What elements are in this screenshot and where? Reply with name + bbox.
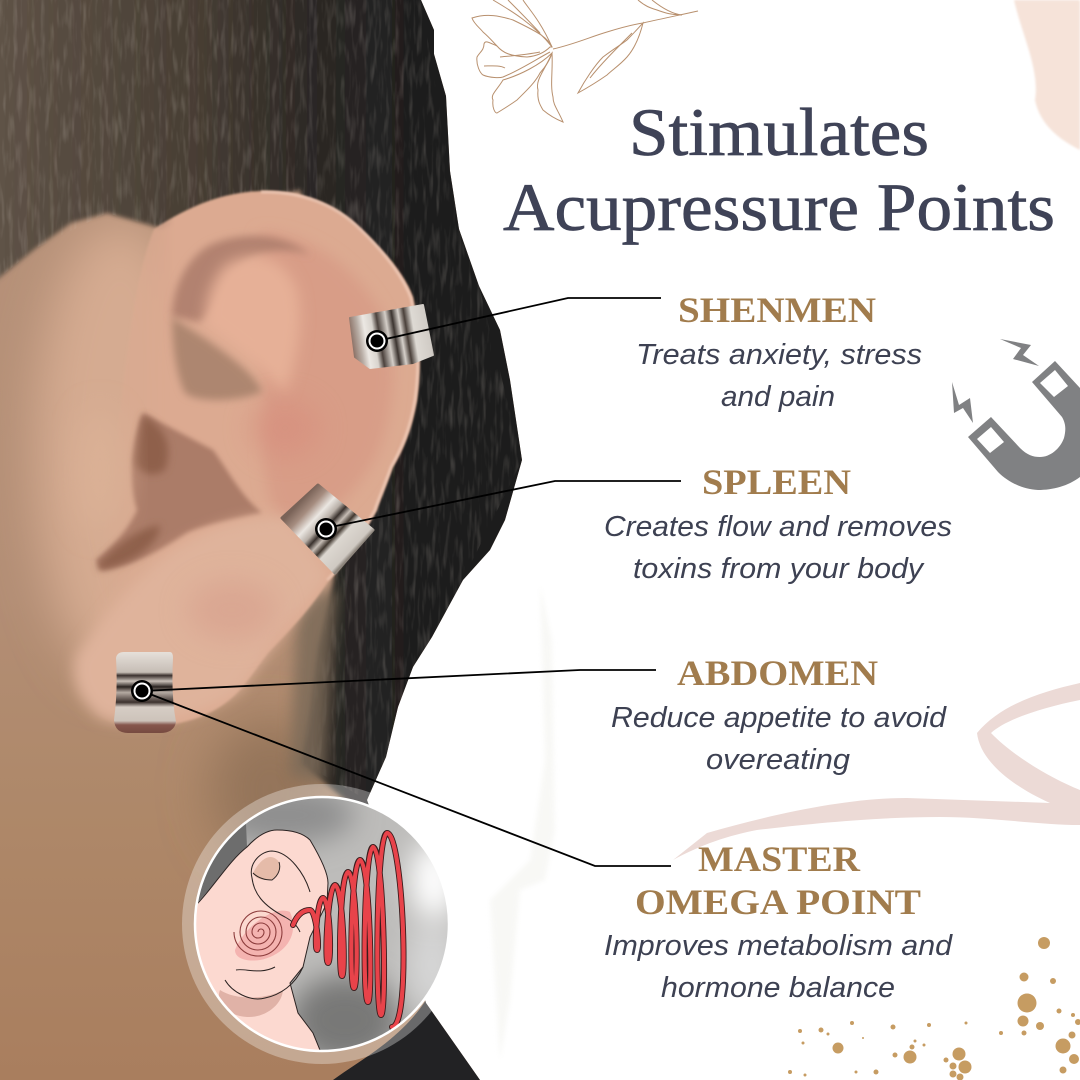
title: Acupressure Points — [503, 169, 1055, 245]
faint torn paper strip — [490, 585, 555, 1060]
hair strand texture — [0, 0, 522, 800]
point: spleen: toxins from your body — [633, 553, 925, 585]
scapha dark triangle — [172, 317, 262, 400]
inset halo — [182, 784, 462, 1064]
neck shadow — [210, 720, 330, 860]
beard feather into skin — [290, 590, 338, 785]
point: master omega: Improves metabolism and — [604, 930, 953, 962]
photo of ear — [0, 0, 560, 1080]
point: abdomen: overeating — [706, 744, 850, 776]
point: abdomen — [611, 653, 947, 776]
inset lobe shade — [219, 990, 283, 1017]
decorative peach blob top right — [1014, 0, 1080, 150]
ear base — [145, 190, 422, 724]
antihelix highlight — [205, 257, 300, 395]
point: shenmen: SHENMEN — [678, 290, 876, 330]
title — [503, 94, 1055, 245]
inset picture — [196, 798, 448, 1050]
ear cuff: abdomen — [114, 652, 176, 733]
concha deep edges — [98, 415, 168, 570]
point: shenmen — [636, 290, 922, 413]
icon: flower line art — [472, 0, 698, 122]
inset sound waves — [293, 833, 403, 1027]
point: spleen — [604, 462, 952, 585]
inner ear mid tone — [267, 246, 390, 513]
upper fossa shadow — [172, 236, 310, 322]
pink brush swirl — [673, 683, 1080, 860]
inset tragus — [253, 857, 279, 880]
point: spleen: SPLEEN — [702, 462, 851, 502]
icon: magnet — [952, 339, 1080, 490]
hair top and beard — [0, 0, 522, 804]
ear cuff: shenmen — [350, 305, 433, 368]
point: abdomen: Reduce appetite to avoid — [611, 702, 947, 734]
tragus light — [131, 446, 140, 487]
point: shenmen: Treats anxiety, stress — [636, 339, 922, 371]
gold speckles — [788, 937, 1080, 1080]
inset pink glow — [235, 911, 293, 961]
point: master omega: OMEGA POINT — [635, 882, 921, 922]
point: master omega — [604, 839, 953, 1004]
shirt — [333, 1000, 490, 1080]
point: master omega: MASTER — [698, 839, 861, 879]
ear cuff: spleen — [282, 485, 373, 573]
pink blush — [252, 412, 302, 443]
point: spleen: Creates flow and removes — [604, 511, 952, 543]
point: shenmen: and pain — [721, 381, 835, 413]
title: Stimulates — [629, 94, 929, 170]
inset illustration — [182, 784, 462, 1065]
point: master omega: hormone balance — [661, 972, 895, 1004]
skin base — [0, 0, 530, 1080]
inset hair — [198, 824, 247, 902]
marker dots — [131, 330, 388, 702]
lower fold lobe top — [74, 517, 329, 723]
point: abdomen: ABDOMEN — [677, 653, 878, 693]
inset white ring — [195, 797, 449, 1051]
inset ear lines — [225, 851, 310, 999]
connector lines — [142, 298, 681, 866]
inset shading — [246, 798, 448, 1050]
face light near ear — [20, 216, 153, 659]
inset spiral — [234, 911, 282, 956]
concha shadow — [96, 413, 262, 570]
lobe blush — [198, 588, 266, 632]
rim highlight — [261, 192, 418, 580]
inset ear and neck — [190, 830, 328, 1055]
